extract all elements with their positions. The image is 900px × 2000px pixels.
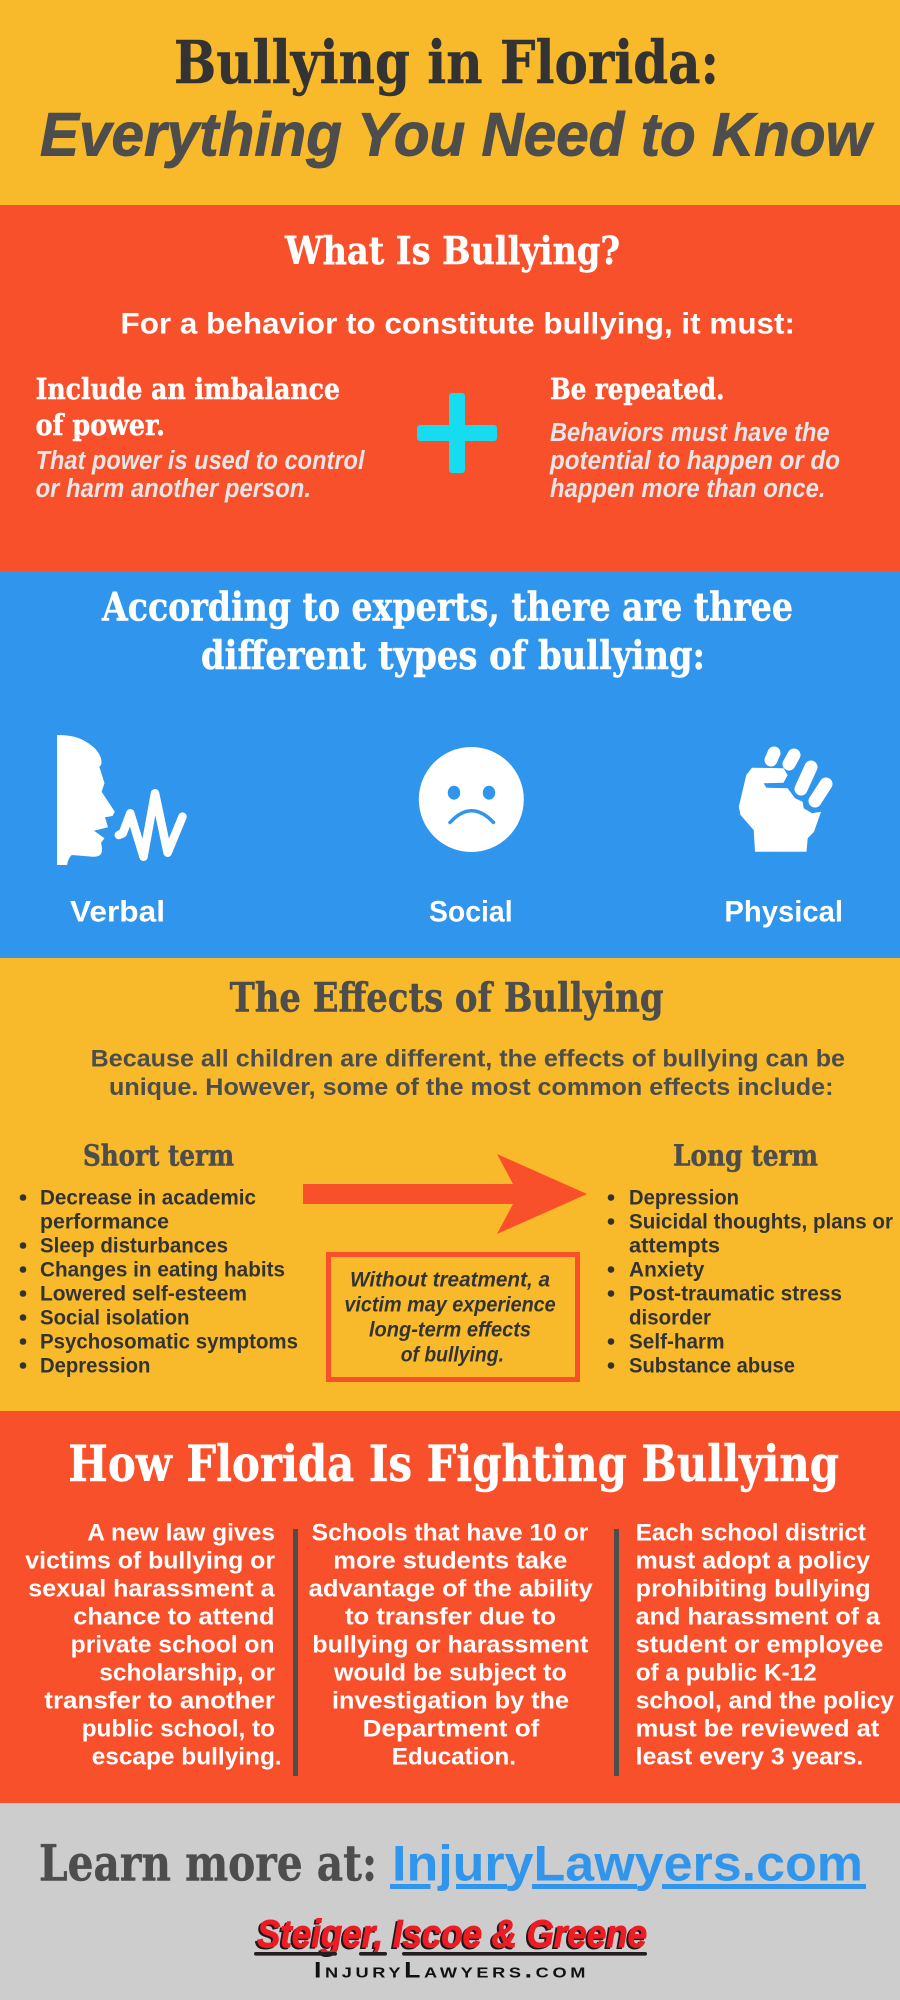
text block: be repeated: potential to happen or do [549, 447, 840, 475]
icon: sad face [419, 747, 524, 852]
heading: long term: Long term [673, 1139, 818, 1173]
text block: imbalance of power [36, 372, 365, 503]
text block: new law: A new law gives [87, 1520, 275, 1547]
label: physical: Physical [724, 896, 843, 929]
text block: school district policy: must be reviewed at [636, 1716, 879, 1743]
icon: raised fist [739, 753, 826, 852]
heading: types of bullying: different types of bullying: [201, 633, 705, 679]
title line 2: Everything You Need to Know [40, 100, 874, 168]
text block: school district policy: must adopt a policy [636, 1548, 870, 1575]
text block: be repeated: happen more than once. [550, 475, 826, 503]
list: long term effects: Depression [629, 1186, 739, 1210]
list: short term effects: Psychosomatic symptoms [40, 1330, 298, 1354]
text block: schools transfer: investigation by the [332, 1688, 569, 1715]
text block: school district policy: prohibiting bullying [636, 1576, 871, 1603]
list: short term effects: Decrease in academic [40, 1186, 256, 1210]
logo: steiger, iscoe and greene [254, 1913, 647, 1983]
heading: effects of bullying: The Effects of Bullying [230, 975, 664, 1022]
panel: what is bullying [0, 205, 900, 571]
list: short term effects: Social isolation [40, 1306, 190, 1330]
panel: how florida is fighting bullying [0, 1411, 900, 1803]
callout: without treatment: long-term effects [369, 1318, 531, 1342]
list: long term effects: attempts [629, 1234, 720, 1258]
text block: effects intro: unique. However, some of the most common effects include: [109, 1074, 834, 1101]
callout: without treatment [328, 1254, 578, 1380]
panel: footer [0, 1803, 900, 2000]
text block: schools transfer [309, 1520, 593, 1771]
text block: imbalance of power: Include an imbalance [36, 372, 340, 406]
text block: new law: scholarship, or [99, 1660, 275, 1687]
text block: be repeated: Be repeated. [550, 372, 724, 406]
list: long term effects: Substance abuse [629, 1354, 795, 1378]
text block: school district policy: school, and the policy [636, 1688, 894, 1715]
panel: types of bullying [0, 571, 900, 958]
heading: types of bullying: According to experts, there are three [101, 585, 793, 631]
list: short term effects: Lowered self-esteem [40, 1282, 247, 1306]
text block: school district policy: least every 3 years. [636, 1744, 863, 1771]
icon: speaking face [57, 735, 182, 865]
logo: steiger, iscoe and greene: Steiger, Iscoe & Greene [255, 1914, 645, 1958]
text block: schools transfer: advantage of the ability [309, 1576, 593, 1603]
text block: effects intro [91, 1046, 845, 1101]
text block: new law: transfer to another [44, 1688, 275, 1715]
divider: column 1 [293, 1529, 298, 1776]
text block: new law: private school on [71, 1632, 274, 1659]
text block: effects intro: Because all children are different, the effects of bullying can be [91, 1046, 845, 1073]
text block: schools transfer: bullying or harassment [312, 1632, 588, 1659]
text block: new law: victims of bullying or [25, 1548, 275, 1575]
list: short term effects: Changes in eating habits [40, 1258, 285, 1282]
text block: school district policy: Each school district [636, 1520, 866, 1547]
list: short term effects: performance [40, 1210, 169, 1234]
panel: title header [0, 0, 900, 205]
text block: schools transfer: Education. [392, 1744, 516, 1771]
panel: effects of bullying [0, 958, 900, 1411]
list: long term effects: disorder [629, 1306, 712, 1330]
list: long term effects: Suicidal thoughts, plans or [629, 1210, 894, 1234]
heading: short term: Short term [83, 1139, 234, 1173]
logo: steiger, iscoe and greene: Steiger, Iscoe & Greene [257, 1913, 647, 1956]
title line 1: Bullying in Florida: [174, 28, 719, 97]
link: injurylawyers.com: InjuryLawyers.com [392, 1836, 863, 1892]
text block: schools transfer: Schools that have 10 or [312, 1520, 589, 1547]
list: long term effects: Anxiety [629, 1258, 704, 1282]
divider: column 2 [614, 1529, 619, 1776]
callout: without treatment: Without treatment, a [350, 1268, 550, 1292]
text block: new law: sexual harassment a [28, 1576, 275, 1603]
list: long term effects [608, 1186, 894, 1378]
text block: school district policy: of a public K-12 [636, 1660, 817, 1687]
text block: new law [25, 1520, 282, 1771]
text: learn more at: Learn more at: [39, 1834, 377, 1893]
text block: schools transfer: would be subject to [333, 1660, 567, 1687]
logo: steiger, iscoe and greene: InjuryLawyers.com [314, 1958, 589, 1983]
text block: imbalance of power: That power is used to control [36, 447, 365, 475]
list: short term effects [20, 1186, 298, 1378]
text block: imbalance of power: or harm another person. [36, 475, 311, 503]
callout: without treatment: victim may experience [344, 1293, 556, 1317]
text block: school district policy: and harassment of a [636, 1604, 880, 1631]
text block: schools transfer: Department of [363, 1716, 540, 1743]
text block: schools transfer: to transfer due to [345, 1604, 556, 1631]
heading: types of bullying [101, 585, 793, 679]
text block: new law: escape bullying. [92, 1744, 282, 1771]
label: social: Social [429, 896, 513, 929]
heading: what is bullying: What Is Bullying? [284, 228, 620, 273]
text block: be repeated [549, 372, 840, 503]
text block: school district policy [636, 1520, 894, 1771]
label: verbal: Verbal [70, 896, 165, 929]
text block: imbalance of power: of power. [36, 408, 165, 442]
text block: school district policy: student or employee [636, 1632, 883, 1659]
list: short term effects: Sleep disturbances [40, 1234, 228, 1258]
arrow: short term to long term [303, 1154, 587, 1234]
text block: new law: public school, to [82, 1716, 275, 1743]
list: long term effects: Self-harm [629, 1330, 724, 1354]
icon: plus sign [417, 393, 497, 473]
text block: new law: chance to attend [73, 1604, 274, 1631]
subheading: definition intro: For a behavior to constitute bullying, it must: [120, 308, 795, 340]
list: long term effects: Post-traumatic stress [629, 1282, 842, 1306]
list: short term effects: Depression [40, 1354, 150, 1378]
callout: without treatment: of bullying. [401, 1343, 504, 1367]
text block: schools transfer: more students take [333, 1548, 567, 1575]
text block: be repeated: Behaviors must have the [550, 419, 830, 447]
